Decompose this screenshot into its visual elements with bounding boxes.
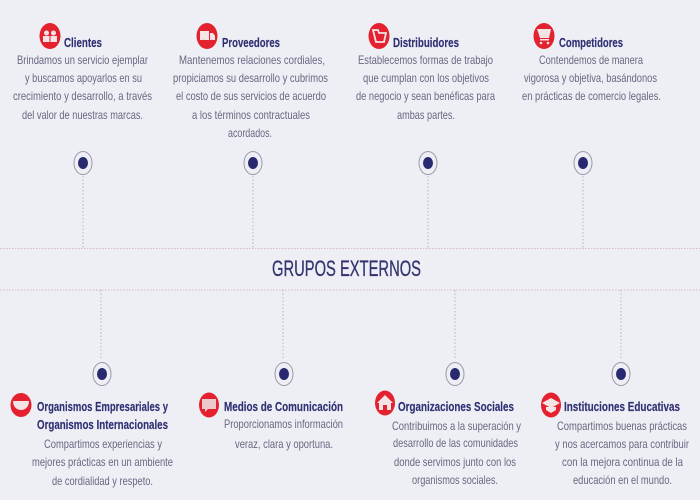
panel: Competidores (522, 23, 661, 103)
heading: Organismos: Organismos Internacionales (37, 418, 168, 432)
panel: Organizaciones Sociales (375, 390, 521, 487)
title: GRUPOS EXTERNOS (272, 256, 421, 281)
text: Competidores description: Contendemos de manera (539, 53, 643, 67)
connector: bottom nodes (93, 290, 630, 386)
icon: medios (199, 392, 219, 418)
icon: competidores (534, 23, 554, 49)
text: Clientes description: del valor de nuestras marcas. (22, 108, 143, 122)
text: Instituciones description: educación en el mundo. (573, 473, 672, 487)
text: Medios description: Proporcionamos información (224, 417, 343, 431)
heading: Organismos: Organismos Empresariales y (37, 400, 168, 414)
text: Proveedores description: a los términos contractuales (192, 108, 310, 122)
icon: organizaciones (375, 390, 395, 416)
heading: Clientes: Clientes (64, 36, 102, 50)
text: Clientes description: Brindamos un servicio ejemplar (17, 53, 148, 67)
text: Organizaciones description: Contribuimos a la superación y (392, 419, 521, 433)
text: Organismos description: de cordialidad y respeto. (52, 474, 153, 488)
text: Proveedores description: propiciamos su desarrollo y cubrimos (173, 71, 328, 85)
text: Medios description: veraz, clara y oportuna. (235, 437, 333, 451)
text: Organizaciones description: organismos sociales. (412, 473, 498, 487)
text: Distribuidores description: que cumplan con los objetivos (363, 71, 489, 85)
text: Instituciones description (555, 419, 689, 487)
heading: Competidores: Competidores (559, 36, 623, 50)
text: Competidores description: en prácticas de comercio legales. (522, 89, 661, 103)
text: Distribuidores description: Establecemos formas de trabajo (358, 53, 493, 67)
text: Distribuidores description (356, 53, 495, 122)
icon: organismos (10, 393, 32, 417)
panel: Proveedores (173, 23, 328, 140)
icon: clientes (40, 23, 60, 49)
text: Organismos description: Compartimos experiencias y (44, 437, 162, 451)
panel: Clientes (13, 23, 152, 122)
text: Distribuidores description: ambas partes. (397, 108, 455, 122)
text: Competidores description: vigorosa y objetiva, basándonos (524, 71, 657, 85)
text: Organismos description (32, 437, 173, 488)
text: Distribuidores description: de negocio y sean benéficas para (356, 89, 495, 103)
panel: Distribuidores (356, 23, 495, 122)
text: Proveedores description: Mantenemos relaciones cordiales, (179, 53, 325, 67)
text: Clientes description (13, 53, 152, 122)
text: Competidores description (522, 53, 661, 103)
panel: Instituciones (541, 392, 689, 487)
connector: top nodes (74, 152, 592, 248)
icon: instituciones (541, 392, 561, 418)
text: Medios description (224, 417, 343, 451)
text: Organizaciones description (392, 419, 521, 487)
heading: Proveedores: Proveedores (222, 36, 280, 50)
icon: proveedores (196, 23, 218, 49)
text: Clientes description: crecimiento y desarrollo, a través (13, 89, 152, 103)
panel: Medios (199, 392, 343, 451)
heading: Organizaciones: Organizaciones Sociales (398, 400, 514, 414)
text: Proveedores description: el costo de sus servicios de acuerdo (176, 89, 326, 103)
heading: Organismos (37, 400, 168, 432)
heading: Medios: Medios de Comunicación (224, 400, 343, 414)
text: Organismos description: mejores prácticas en un ambiente (32, 455, 173, 469)
text: Proveedores description: acordados. (228, 126, 272, 140)
text: Organizaciones description: donde servimos junto con los (394, 455, 516, 469)
panel: Organismos (10, 393, 173, 488)
text: Clientes description: y buscamos apoyarlos en su (25, 71, 142, 85)
text: Organizaciones description: desarrollo de las comunidades (393, 436, 518, 450)
heading: Distribuidores: Distribuidores (393, 36, 459, 50)
text: Proveedores description (173, 53, 328, 140)
icon: distribuidores (368, 23, 390, 49)
